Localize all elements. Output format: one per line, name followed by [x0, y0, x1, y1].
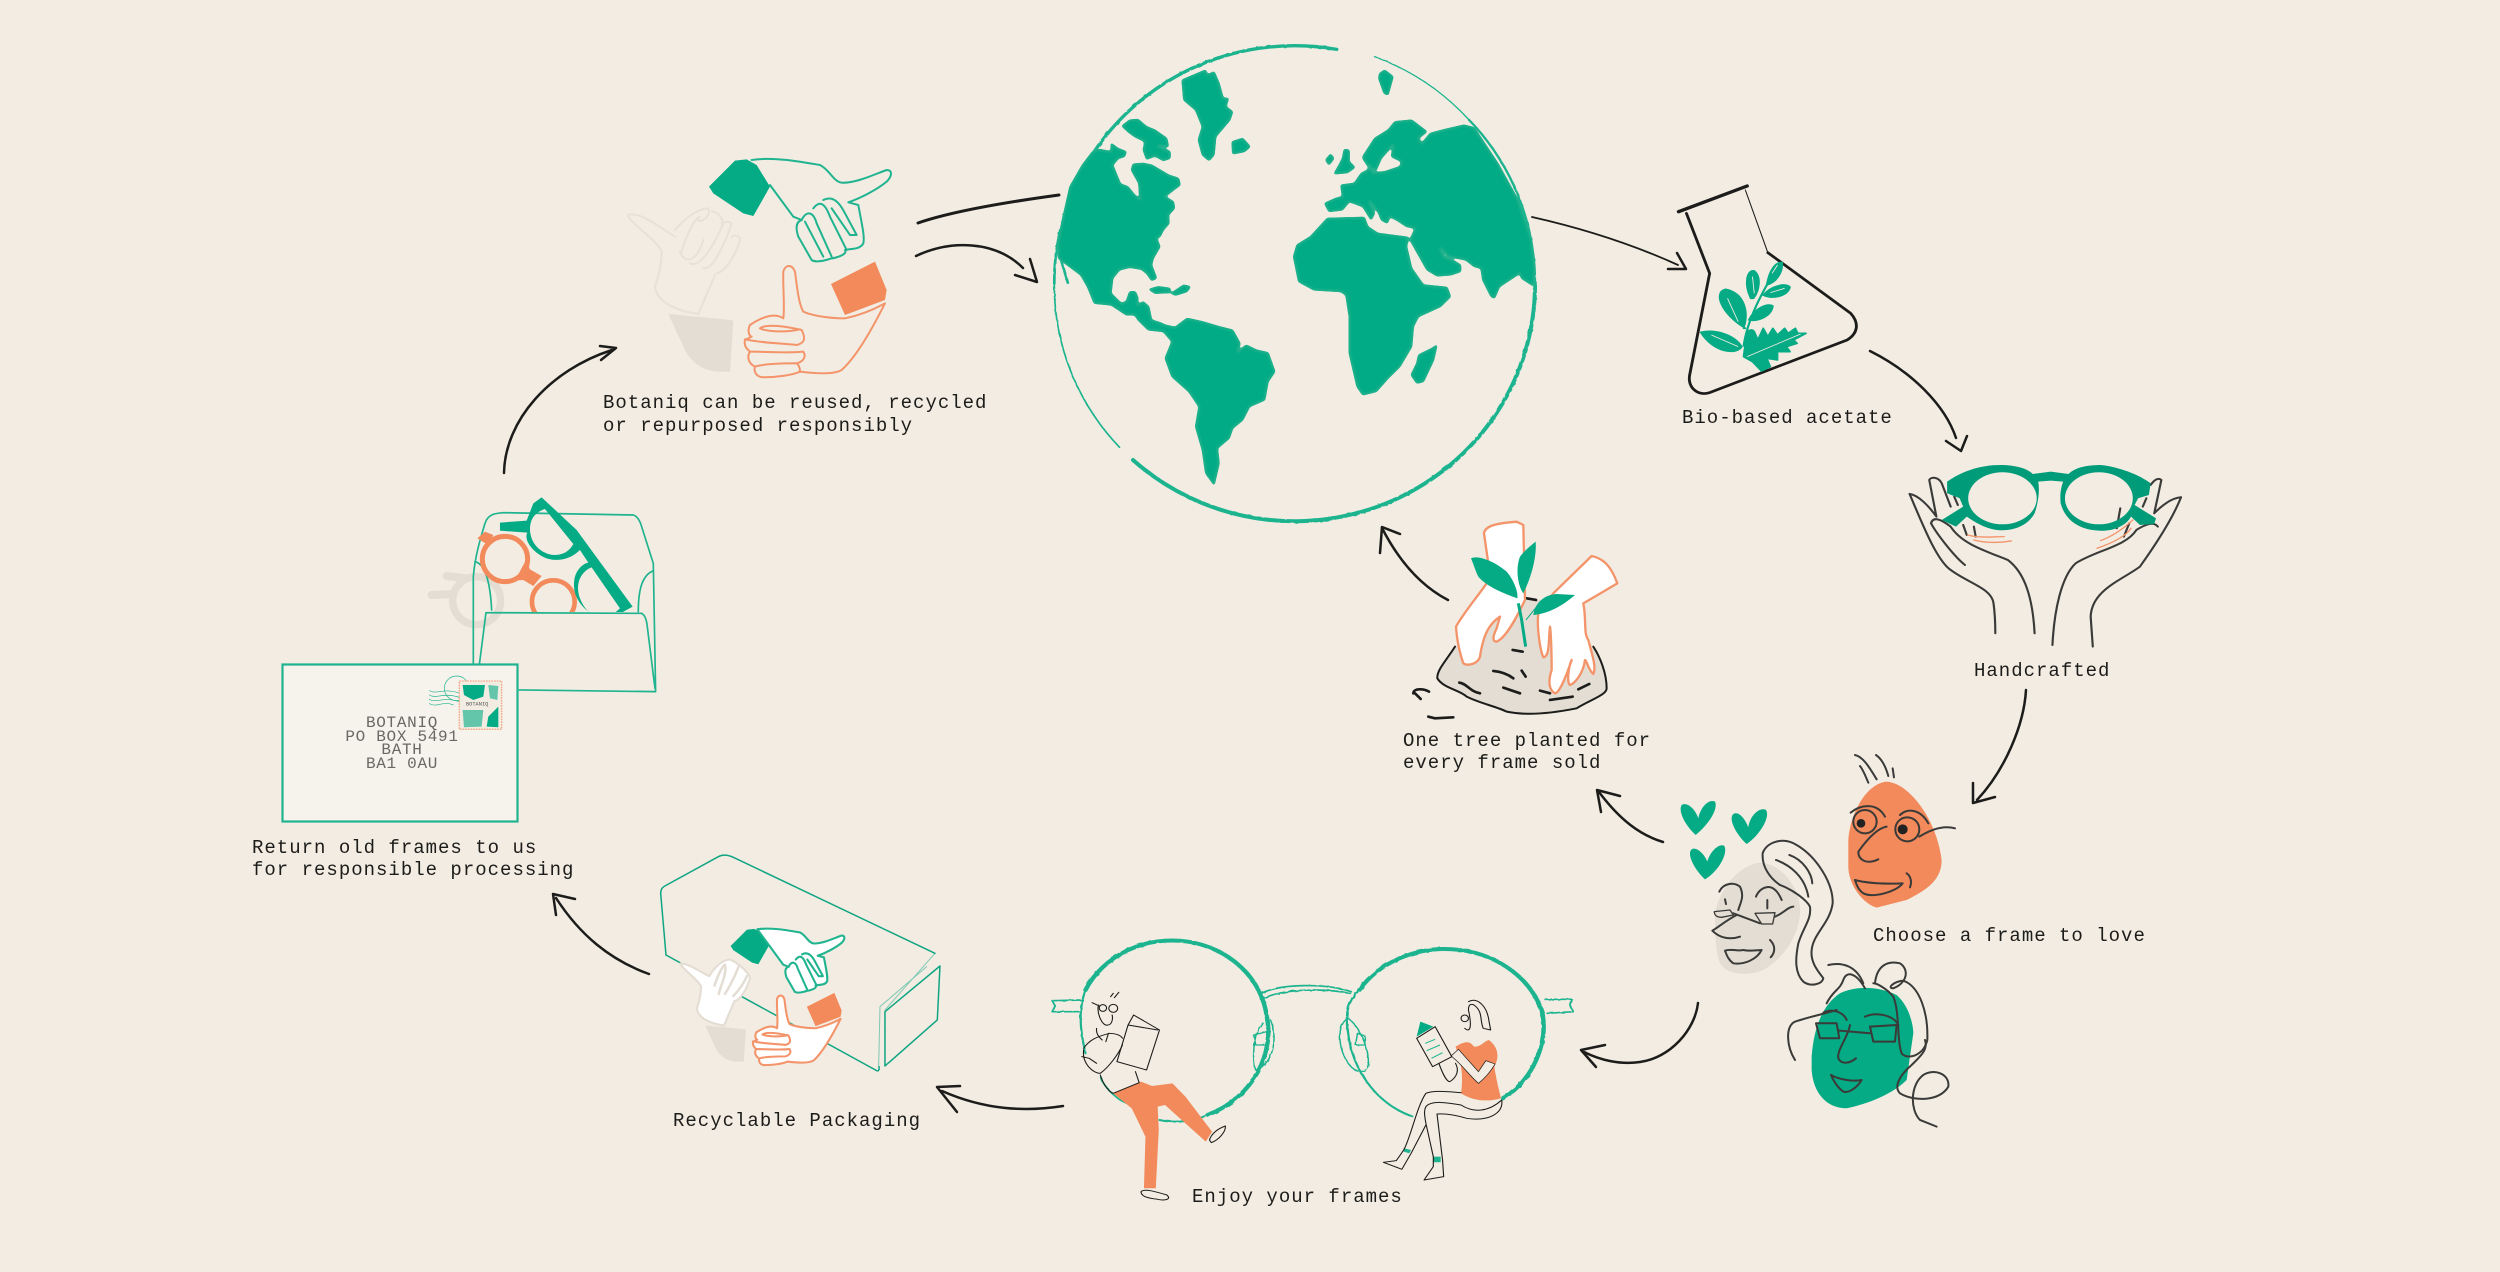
panel: globe: [1054, 46, 1535, 521]
orange and green glasses: [477, 497, 633, 623]
panel: bio-based acetate: [1679, 186, 1893, 429]
address: [345, 714, 459, 773]
glasses frame: [1052, 940, 1573, 1122]
postmark and stamp: [429, 676, 502, 729]
label: Handcrafted: [1974, 660, 2110, 682]
label: Choose a frame to love: [1873, 925, 2146, 947]
envelope back: [473, 513, 656, 692]
arrow: handcrafted to faces: [1973, 690, 2026, 803]
orange hand: [745, 262, 887, 377]
postmark and stamp: BOTANIQ: [466, 701, 488, 707]
panel: tree planted: [1403, 522, 1651, 774]
address: BOTANIQ: [366, 714, 438, 732]
soil mound: [1437, 598, 1607, 714]
arrow: tree to globe: [1380, 527, 1448, 600]
man reading: [1082, 992, 1225, 1200]
grey glasses: [432, 576, 501, 625]
arrow: packaging to return: [553, 894, 649, 974]
illustration: glasses with readers: [1052, 940, 1573, 1200]
label: One tree planted for: [1403, 730, 1651, 752]
illustration: envelope with glasses: [432, 497, 656, 692]
arrow: flask to glasses: [1870, 351, 1967, 451]
label: Enjoy your frames: [1192, 1186, 1403, 1208]
envelope front pocket: [479, 613, 655, 688]
illustration: hands planting seedling: [1413, 522, 1617, 718]
leaves: [1701, 263, 1806, 371]
panel: reuse recycle repurpose: [603, 159, 987, 437]
arrow: faces to tree: [1597, 790, 1663, 842]
label: Recyclable Packaging: [673, 1110, 921, 1132]
letter: [282, 664, 518, 822]
label: Bio-based acetate: [1682, 407, 1893, 429]
illustration: box outline: [661, 855, 940, 1071]
illustration: recycling hands: [680, 929, 844, 1065]
panel: recyclable packaging: [661, 855, 940, 1132]
panel: enjoy your frames: [1052, 940, 1573, 1208]
continents: [1058, 70, 1535, 485]
pressure marks: [1968, 520, 2133, 548]
grey hand: [628, 208, 740, 372]
woman reading: [1383, 1000, 1502, 1180]
label: Return old frames to us: [252, 837, 537, 859]
panel: handcrafted: [1910, 465, 2181, 682]
green hand: [709, 159, 891, 261]
label line two: for responsible processing: [252, 859, 574, 881]
address: BATH: [381, 741, 423, 759]
panel: return old frames: [252, 497, 656, 881]
label: Botaniq can be reused, recycled: [603, 392, 987, 414]
address: PO BOX 5491: [345, 728, 459, 746]
address: BA1 0AU: [366, 755, 438, 773]
grey face: [1712, 841, 1833, 985]
arrow: faces to enjoy: [1581, 1003, 1698, 1067]
label line two: or repurposed responsibly: [603, 415, 913, 437]
arrow: globe to flask: [1532, 217, 1686, 269]
arrow: enjoy to packaging: [937, 1086, 1063, 1112]
left hand: [1456, 522, 1525, 665]
right hand: [1538, 556, 1617, 693]
arrow: botaniq to globe: [916, 245, 1037, 282]
illustration: recycling hands: [628, 159, 891, 377]
green face: [1788, 962, 1948, 1127]
glasses: [1942, 465, 2156, 531]
label line two: every frame sold: [1403, 752, 1601, 774]
hearts: [1681, 801, 1767, 879]
arrow: botaniq line to globe: [918, 195, 1059, 223]
illustration: hands holding glasses: [1910, 465, 2181, 647]
panel: choose a frame: [1681, 755, 2146, 1127]
globe outline ring: [1054, 46, 1535, 521]
icon: flask with leaves: [1679, 186, 1856, 394]
arrow: return to botaniq: [504, 346, 616, 473]
flask outline: [1679, 186, 1856, 394]
illustration: faces: [1681, 755, 1955, 1127]
hands: [1910, 478, 2181, 647]
soil outline and marks: [1413, 598, 1607, 718]
seedling: [1471, 542, 1575, 647]
orange face: [1848, 755, 1955, 908]
